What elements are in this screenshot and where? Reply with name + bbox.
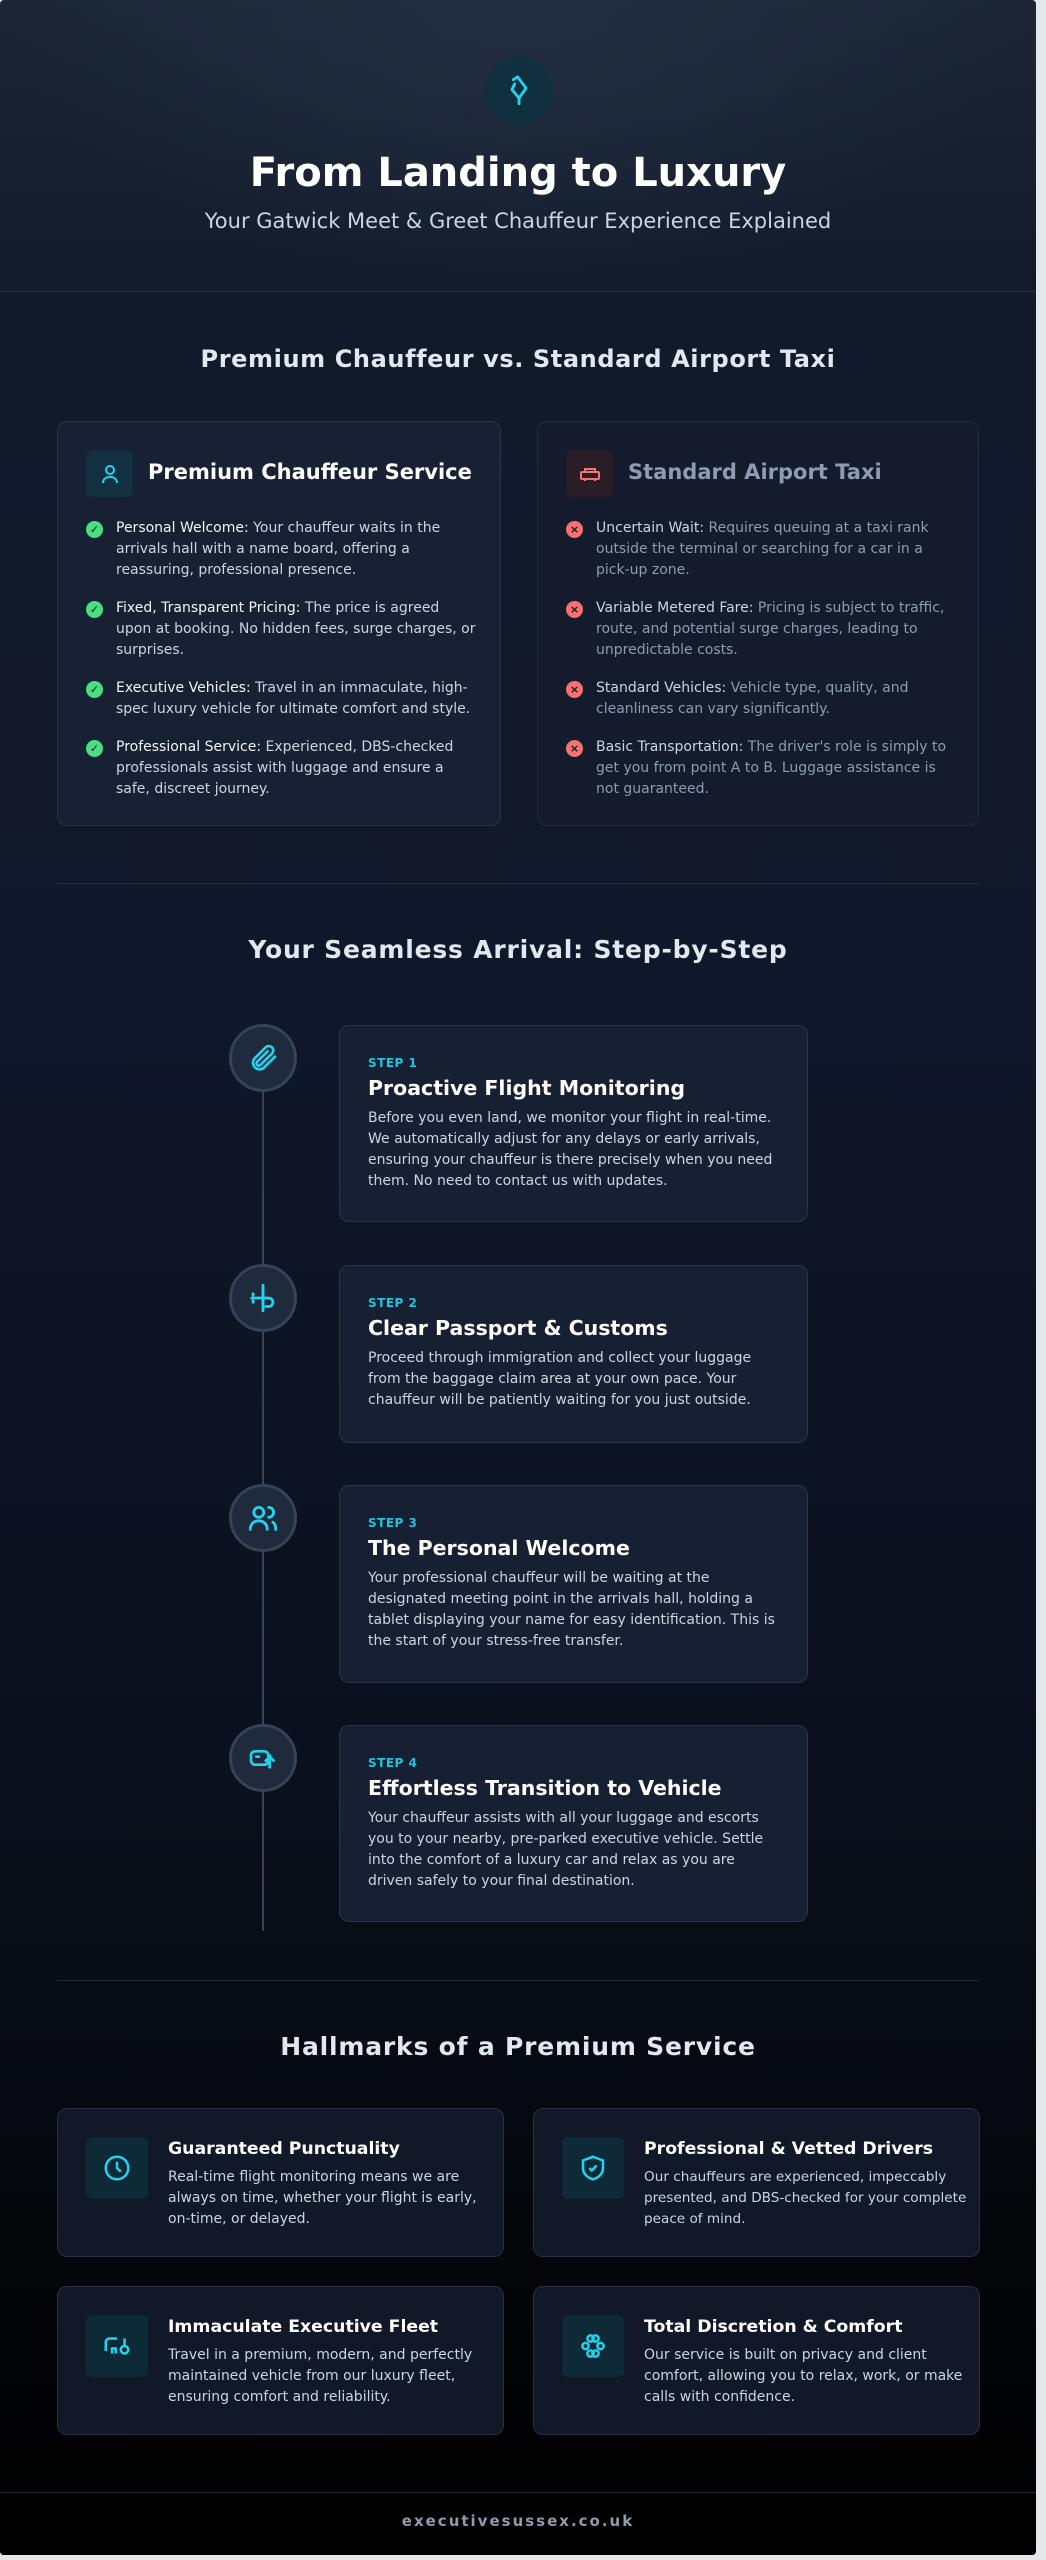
step 1 card: Proactive Flight Monitoring — [368, 1076, 685, 1100]
step 1 card: STEP 1 — [368, 1056, 417, 1070]
timeline line — [262, 1060, 264, 1931]
item 4: Basic Transportation: The driver's role is simply to get you from point A to B. Luggage assistance is not guaranteed. — [596, 739, 946, 797]
heading: steps: Your Seamless Arrival: Step-by-Step — [248, 935, 788, 964]
panel: premium chauffeur: ✓ — [90, 742, 99, 755]
step 1 card — [339, 1025, 808, 1222]
item 2: Variable Metered Fare: Pricing is subject to traffic, route, and potential surge charges, leading to unpredictable costs. — [596, 600, 944, 658]
step 4 card: Effortless Transition to Vehicle — [368, 1776, 722, 1800]
panel: standard taxi — [537, 421, 979, 826]
heading: comparison: Premium Chauffeur vs. Standard Airport Taxi — [201, 345, 835, 373]
step 3 card: The Personal Welcome — [368, 1536, 630, 1560]
icon: person — [86, 450, 133, 497]
hallmark: drivers: Our chauffeurs are experienced, impeccably presented, and DBS-checked for your complete peace of mind. — [644, 2169, 966, 2227]
step 3 card: Your professional chauffeur will be waiting at the designated meeting point in the arrivals hall, holding a tablet displaying your name for easy identification. This is the start of your stress-free transfer. — [368, 1570, 775, 1649]
hallmark: discretion — [533, 2286, 980, 2435]
icon: taxi — [566, 450, 613, 497]
step 3 card: STEP 3 — [368, 1516, 417, 1530]
step 2 card — [339, 1265, 808, 1443]
item 1: Personal Welcome: Your chauffeur waits in the arrivals hall with a name board, offering a reassuring, professional presence. — [116, 520, 440, 578]
step 4 card — [339, 1725, 808, 1922]
icon: rings — [562, 2315, 624, 2377]
panel: premium chauffeur: ✓ — [90, 683, 99, 696]
step 2 card: STEP 2 — [368, 1296, 417, 1310]
panel heading: Premium Chauffeur Service — [148, 460, 472, 484]
icon: shield — [562, 2137, 624, 2199]
hallmark: punctuality: Guaranteed Punctuality — [168, 2139, 400, 2159]
item 3: Executive Vehicles: Travel in an immaculate, high-spec luxury vehicle for ultimate comfort and style. — [116, 680, 470, 717]
panel: standard taxi: × — [570, 683, 579, 696]
item 1: Uncertain Wait: Requires queuing at a taxi rank outside the terminal or searching for a car in a pick-up zone. — [596, 520, 929, 578]
step 4 card: STEP 4 — [368, 1756, 417, 1770]
panel: premium chauffeur: ✓ — [90, 523, 99, 536]
footer: executivesussex.co.uk — [402, 2512, 634, 2530]
panel: premium chauffeur — [57, 421, 501, 826]
icon: step 1 paperclip — [229, 1024, 297, 1092]
icon: step 3 people — [229, 1484, 297, 1552]
panel: standard taxi: × — [570, 742, 579, 755]
title: From Landing to Luxury — [250, 150, 786, 196]
step 2 card: Clear Passport & Customs — [368, 1316, 668, 1340]
subtitle: Your Gatwick Meet & Greet Chauffeur Experience Explained — [205, 209, 831, 233]
hallmark: fleet: Travel in a premium, modern, and perfectly maintained vehicle from our luxury fleet, ensuring comfort and reliability. — [168, 2347, 472, 2405]
hallmark: fleet — [57, 2286, 504, 2435]
panel: premium chauffeur: ✓ — [90, 603, 99, 616]
icon: clock — [86, 2137, 148, 2199]
panel: standard taxi: × — [570, 603, 579, 616]
step 1 card: Before you even land, we monitor your flight in real-time. We automatically adjust for any delays or early arrivals, ensuring your chauffeur is there precisely when you need them. No need to contact us with updates. — [368, 1110, 772, 1189]
panel: standard taxi: × — [570, 523, 579, 536]
icon: step 4 vehicle — [229, 1724, 297, 1792]
icon: car — [86, 2315, 148, 2377]
hallmark: drivers — [533, 2108, 980, 2257]
item 2: Fixed, Transparent Pricing: The price is agreed upon at booking. No hidden fees, surge charges, or surprises. — [116, 600, 475, 658]
header band — [0, 0, 1036, 292]
hallmark: drivers: Professional & Vetted Drivers — [644, 2139, 933, 2159]
hallmark: discretion: Total Discretion & Comfort — [644, 2317, 902, 2337]
step 4 card: Your chauffeur assists with all your luggage and escorts you to your nearby, pre-parked executive vehicle. Settle into the comfort of a luxury car and relax as you are driven safely to your final destination. — [368, 1810, 763, 1889]
item 4: Professional Service: Experienced, DBS-checked professionals assist with luggage and ensure a safe, discreet journey. — [116, 739, 453, 797]
hallmark: punctuality: Real-time flight monitoring means we are always on time, whether your flight is early, on-time, or delayed. — [168, 2169, 477, 2227]
hallmark: punctuality — [57, 2108, 504, 2257]
panel heading: Standard Airport Taxi — [628, 460, 882, 484]
footer — [0, 2492, 1036, 2555]
icon: step 2 passport — [229, 1264, 297, 1332]
step 2 card: Proceed through immigration and collect your luggage from the baggage claim area at your own pace. Your chauffeur will be patiently waiting for you just outside. — [368, 1350, 751, 1408]
item 3: Standard Vehicles: Vehicle type, quality, and cleanliness can vary significantly. — [596, 680, 908, 717]
hallmark: discretion: Our service is built on privacy and client comfort, allowing you to relax, work, or make calls with confidence. — [644, 2347, 962, 2405]
icon: header logo — [485, 57, 553, 125]
hallmark: fleet: Immaculate Executive Fleet — [168, 2317, 438, 2337]
step 3 card — [339, 1485, 808, 1683]
heading: hallmarks: Hallmarks of a Premium Service — [280, 2032, 756, 2061]
